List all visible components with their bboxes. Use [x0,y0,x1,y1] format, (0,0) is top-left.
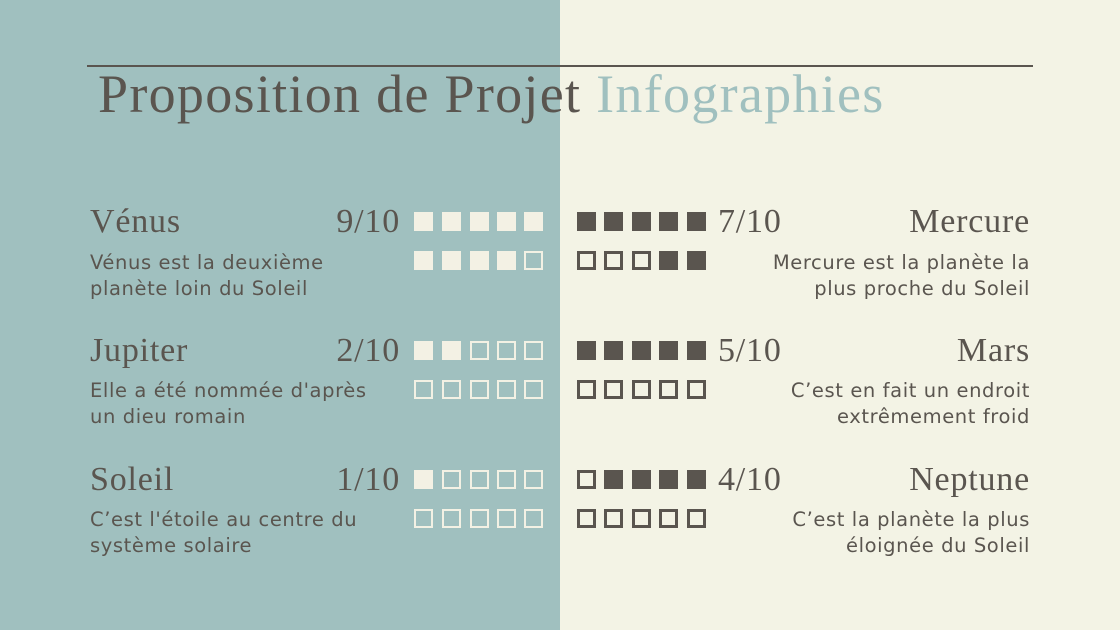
description: planète loin du Soleil [90,277,308,300]
description: système solaire [90,534,252,557]
description [90,379,367,428]
description [791,379,1030,428]
panel: Mercure [577,203,1030,300]
description: un dieu romain [90,405,246,428]
top rule [87,65,1033,67]
name: Neptune [909,461,1030,498]
score: 5/10 [718,332,782,369]
squares [577,212,706,231]
name: Mars [957,332,1030,369]
name: Vénus [90,203,181,240]
description: extrêmement froid [837,405,1030,428]
name: Mercure [909,203,1030,240]
description [90,251,324,300]
description: Elle a été nommée d'après [90,379,367,402]
score: 4/10 [718,461,782,498]
description: C’est la planète la plus [792,508,1030,531]
description: éloignée du Soleil [846,534,1030,557]
description: C’est l'étoile au centre du [90,508,357,531]
description: plus proche du Soleil [814,277,1030,300]
panel: Soleil [90,461,543,557]
description [90,508,357,557]
description [773,251,1030,300]
squares [577,470,706,489]
panel: Neptune [577,461,1030,557]
left teal background [0,0,560,630]
title: Proposition de Projet Infographies [98,64,885,124]
squares [414,470,543,489]
name: Jupiter [90,332,188,369]
description: C’est en fait un endroit [791,379,1030,402]
panel: Jupiter [90,332,543,428]
panel: Mars [577,332,1030,428]
panel: Vénus [90,203,543,300]
squares [577,341,706,360]
squares [414,212,543,231]
description: Mercure est la planète la [773,251,1030,274]
description: Vénus est la deuxième [90,251,324,274]
score: 2/10 [336,332,400,369]
squares [414,341,543,360]
description [792,508,1030,557]
name: Soleil [90,461,174,498]
score: 1/10 [336,461,400,498]
score: 7/10 [718,203,782,240]
score: 9/10 [336,203,400,240]
